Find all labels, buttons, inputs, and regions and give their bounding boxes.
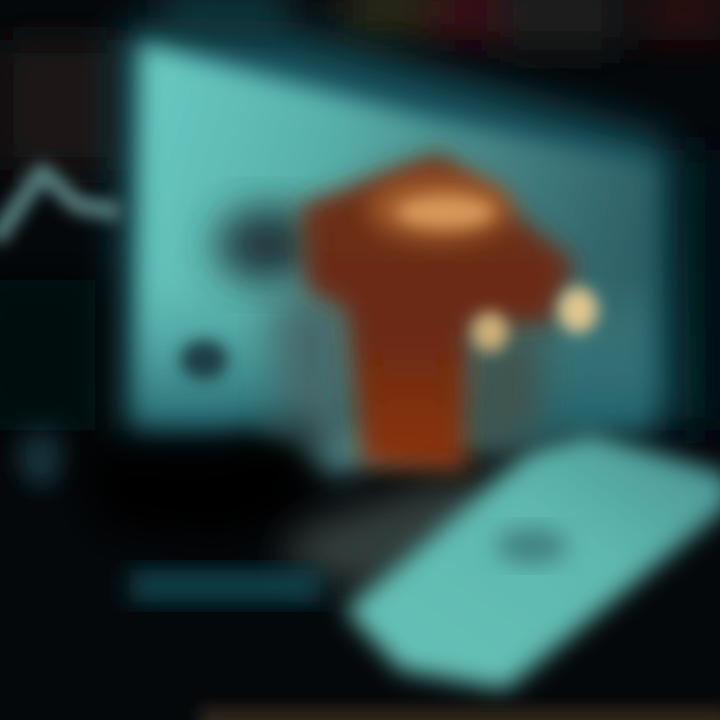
- panel: teal wall: [135, 42, 655, 470]
- panel: teal back wall edge: [120, 30, 680, 430]
- chart line on the left: [0, 172, 120, 240]
- shadow beside the house: [216, 207, 320, 283]
- roof glow: [368, 174, 512, 242]
- light: right lamp: [558, 287, 598, 333]
- left teal haze: [18, 414, 66, 486]
- light: left lamp: [472, 312, 508, 352]
- teal strip lower left: [130, 570, 320, 602]
- house right shade: [470, 320, 545, 470]
- red house: [300, 152, 575, 475]
- icon: dark spot on wall: [180, 340, 228, 380]
- grey table surface: [280, 480, 500, 590]
- phone dark mark: [496, 528, 568, 564]
- top background tones: [0, 0, 720, 430]
- phone: [345, 432, 720, 690]
- house side wall: [270, 290, 350, 480]
- bottom brown edge: [200, 708, 720, 720]
- dark object in foreground: [0, 280, 315, 545]
